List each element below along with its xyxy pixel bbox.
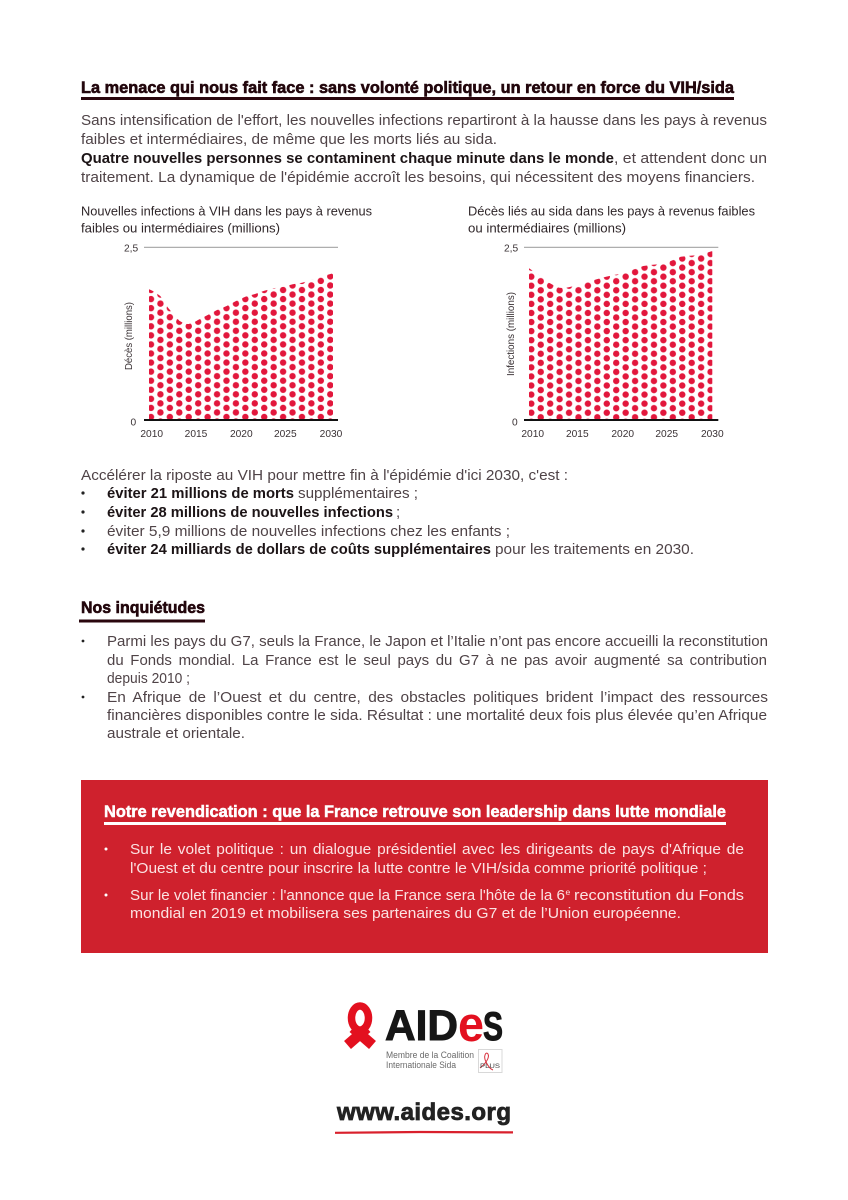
text block: accélérer la riposte: Accélérer la riposte au VIH pour mettre fin à l'épidémie d'ici 2030, c'est : xyxy=(81,467,568,484)
text block: inquiétudes: australe et orientale. xyxy=(107,725,245,742)
logo wordmark xyxy=(385,998,503,1052)
logo tagline: Internationale Sida xyxy=(386,1060,457,1071)
chart title: décès: Décès liés au sida dans les pays à revenus faibles xyxy=(468,204,755,218)
red brush line xyxy=(335,1131,513,1134)
text block: inquiétudes: depuis 2010 ; xyxy=(107,670,190,687)
panel bullets: mondial en 2019 et mobilisera ses partenaires du G7 et de l’Union européenne. xyxy=(130,905,681,922)
logo wordmark: e xyxy=(458,998,484,1052)
x axis labels xyxy=(521,429,724,440)
icon: red ribbon xyxy=(348,1006,372,1045)
icon: coalition plus xyxy=(478,1050,502,1072)
chart title: nouvelles infections: Nouvelles infections à VIH dans les pays à revenus xyxy=(81,204,372,218)
logo wordmark: AID xyxy=(385,1002,458,1050)
icon: coalition plus: PLUS xyxy=(480,1063,501,1070)
intro text block: , et attendent donc un xyxy=(614,150,767,167)
intro text block xyxy=(81,112,767,186)
y axis labels: Décès (millions) xyxy=(124,302,135,370)
intro text block: traitement. La dynamique de l'épidémie accroît les besoins, qui nécessitent des moyens financiers. xyxy=(81,169,755,186)
heading: nos inquiétudes: Nos inquiétudes xyxy=(81,599,205,617)
dotted area xyxy=(149,273,333,420)
panel heading: Notre revendication : que la France retrouve son leadership dans lutte mondiale xyxy=(104,803,726,821)
text block: accélérer la riposte xyxy=(81,467,694,558)
y axis labels: Infections (millions) xyxy=(506,292,517,376)
panel bullets: e xyxy=(566,887,570,897)
text block: accélérer la riposte: pour les traitements en 2030. xyxy=(495,541,694,558)
panel bullets xyxy=(104,841,744,922)
x axis labels: 2015 xyxy=(566,429,589,440)
logo: AIDES xyxy=(348,998,503,1072)
text block: accélérer la riposte: supplémentaires ; xyxy=(298,485,418,502)
text block: inquiétudes: financières disponibles contre le sida. Résultat : une mortalité deux fois plus élevée qu’en Afrique xyxy=(107,707,767,724)
y axis labels: 2,5 xyxy=(504,244,518,254)
panel bullets: Sur le volet politique : un dialogue présidentiel avec les dirigeants de pays d'Afrique de xyxy=(130,841,744,858)
chart: nouvelles infections xyxy=(81,204,372,440)
x axis labels: 2015 xyxy=(185,429,208,440)
chart title: nouvelles infections: faibles ou intermédiaires (millions) xyxy=(81,222,280,236)
y axis labels: 2,5 xyxy=(124,244,138,254)
y axis labels xyxy=(504,244,518,428)
text block: accélérer la riposte: éviter 5,9 millions de nouvelles infections chez les enfants ; xyxy=(107,523,510,540)
text block: inquiétudes xyxy=(82,633,768,742)
panel bullets: reconstitution du Fonds xyxy=(574,887,744,904)
text block: inquiétudes: En Afrique de l’Ouest et du centre, des obstacles politiques brident l’impact des ressources xyxy=(107,689,768,706)
chart title: décès xyxy=(468,204,755,236)
text block: accélérer la riposte: éviter 28 millions de nouvelles infections xyxy=(107,504,393,521)
dotted area xyxy=(529,251,712,420)
text block: accélérer la riposte: éviter 21 millions de morts xyxy=(107,485,294,502)
panel: notre revendication xyxy=(81,780,768,953)
chart: décès xyxy=(468,204,755,440)
x axis labels: 2010 xyxy=(140,429,163,440)
x axis labels: 2025 xyxy=(274,429,297,440)
intro text block: Sans intensification de l'effort, les nouvelles infections repartiront à la hausse dans les pays à revenus xyxy=(81,112,767,129)
logo tagline xyxy=(386,1050,474,1071)
logo tagline: Membre de la Coalition xyxy=(386,1050,474,1061)
intro text block: Quatre nouvelles personnes se contaminent chaque minute dans le monde xyxy=(81,150,614,167)
text block: inquiétudes: du Fonds mondial. La France est le seul pays du G7 à ne pas avoir augmenté sa contribution xyxy=(107,652,767,669)
panel bullets: l'Ouest et du centre pour inscrire la lutte contre le VIH/sida comme priorité politique ; xyxy=(130,860,707,877)
x axis labels: 2020 xyxy=(611,429,634,440)
x axis labels: 2030 xyxy=(701,429,724,440)
y axis labels: 0 xyxy=(130,418,136,428)
logo wordmark: S xyxy=(483,1005,503,1049)
x axis labels: 2010 xyxy=(521,429,544,440)
y axis labels xyxy=(124,244,138,428)
chart title: nouvelles infections xyxy=(81,204,372,236)
x axis labels: 2020 xyxy=(230,429,253,440)
panel bullets: Sur le volet financier : l'annonce que la France sera l'hôte de la 6 xyxy=(130,887,565,904)
text block: accélérer la riposte: éviter 24 milliards de dollars de coûts supplémentaires xyxy=(107,541,491,558)
x axis labels: 2025 xyxy=(655,429,678,440)
text block: inquiétudes: Parmi les pays du G7, seuls la France, le Japon et l’Italie n’ont pas encore accueilli la reconstitution xyxy=(107,633,768,650)
x axis labels: 2030 xyxy=(320,429,343,440)
website url: www.aides.org xyxy=(336,1099,511,1126)
y axis labels: 0 xyxy=(512,418,518,428)
intro text block: faibles et intermédiaires, de même que les morts liés au sida. xyxy=(81,131,497,148)
x axis labels xyxy=(140,429,343,440)
heading: la menace: La menace qui nous fait face : sans volonté politique, un retour en force du VIH/sida xyxy=(81,79,735,97)
text block: accélérer la riposte: ; xyxy=(396,504,400,521)
chart title: décès: ou intermédiaires (millions) xyxy=(468,222,626,236)
